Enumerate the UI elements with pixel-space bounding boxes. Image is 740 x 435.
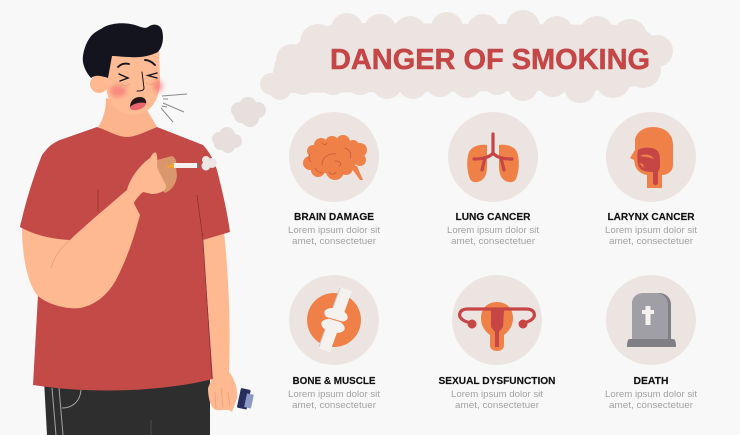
label: SEXUAL DYSFUNCTION (438, 375, 556, 387)
icon: brain (303, 135, 367, 180)
label: LUNG CANCER (456, 211, 531, 223)
sleeve edge (20, 222, 76, 240)
neck (98, 98, 157, 137)
eye bags (122, 82, 154, 86)
item: larynx cancer: amet, consectetuer (609, 236, 693, 247)
mouth (130, 97, 146, 110)
icon: head cross-section (630, 127, 673, 188)
title: DANGER OF SMOKING (330, 44, 650, 76)
item: brain damage: amet, consectetuer (292, 236, 376, 247)
shirt (20, 127, 230, 391)
left arm (22, 190, 140, 308)
description: Lorem ipsum dolor sit (605, 225, 697, 236)
fist (92, 152, 177, 220)
description: Lorem ipsum dolor sit (288, 225, 380, 236)
label: BRAIN DAMAGE (294, 211, 374, 223)
description: Lorem ipsum dolor sit (451, 389, 543, 400)
item: larynx cancer (605, 112, 697, 247)
face (106, 50, 160, 115)
item: death: amet, consectetuer (609, 400, 693, 411)
eyes and brows (118, 60, 157, 91)
shirt creases (98, 190, 212, 378)
icon: lungs (467, 134, 519, 182)
icon: bone joint (307, 287, 361, 352)
description: Lorem ipsum dolor sit (288, 389, 380, 400)
item: sexual dysfunction (438, 275, 556, 411)
label: LARYNX CANCER (608, 211, 695, 223)
label: BONE & MUSCLE (292, 375, 376, 387)
item: bone and muscle (288, 275, 380, 411)
hair (83, 23, 163, 78)
smoke puffs (212, 97, 266, 153)
cheeks (110, 80, 163, 97)
description: Lorem ipsum dolor sit (447, 225, 539, 236)
cigarette (165, 163, 199, 168)
cigarette smoke (202, 156, 217, 170)
item: bone and muscle: amet, consectetuer (292, 400, 376, 411)
item: lung cancer: amet, consectetuer (451, 236, 535, 247)
item: sexual dysfunction: amet, consectetuer (455, 400, 539, 411)
item: death (605, 275, 697, 411)
icon: gravestone (627, 293, 676, 347)
trousers (44, 375, 210, 435)
ear (90, 75, 108, 93)
cough lines (161, 94, 187, 122)
character (20, 23, 255, 435)
right arm and hand (203, 232, 237, 412)
label: DEATH (634, 375, 668, 387)
item: lung cancer (447, 112, 539, 247)
description: Lorem ipsum dolor sit (605, 389, 697, 400)
title cloud (260, 10, 673, 103)
inhaler (237, 388, 255, 410)
item: brain damage (288, 112, 380, 247)
icon: reproductive system (460, 302, 534, 351)
